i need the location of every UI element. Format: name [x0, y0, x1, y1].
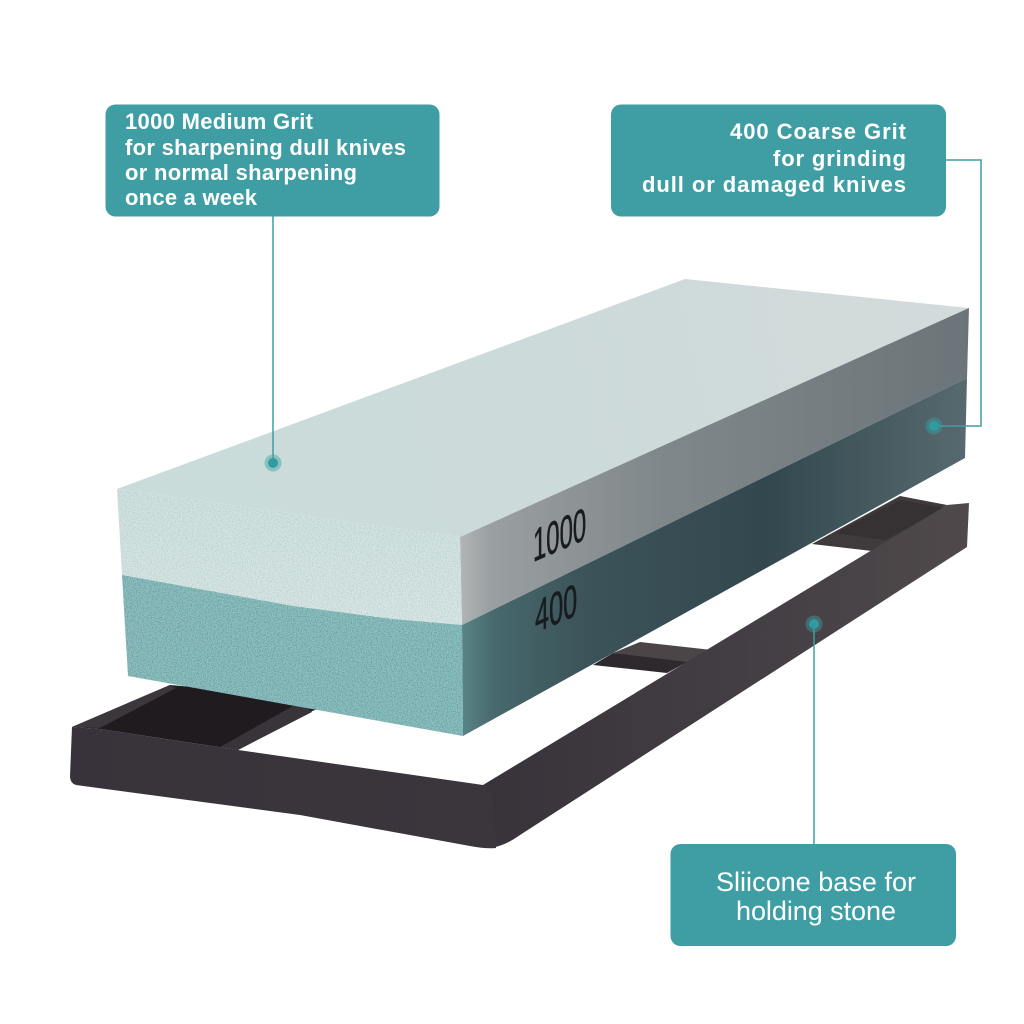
callout text: 400 Coarse Grit: [730, 119, 907, 144]
callout text: for sharpening dull knives: [125, 135, 406, 160]
callout box: [670, 844, 956, 946]
frame: front rail: [70, 727, 496, 848]
stone: right side 1000 grit layer: [460, 308, 969, 625]
frame: middle crossbar: [593, 642, 712, 673]
callout text: once a week: [125, 185, 258, 210]
leader line: 1000 grit: [264, 216, 282, 472]
stone marking: 400: 400: [535, 575, 577, 644]
frame: back rail and crossbar: [812, 496, 947, 551]
stone: top face: [117, 279, 969, 537]
callout text: dull or damaged knives: [642, 172, 906, 197]
stone marking: 1000: 1000: [533, 497, 586, 572]
callout text: [716, 867, 916, 926]
callout text: 1000 Medium Grit: [125, 109, 314, 134]
callout text: holding stone: [736, 896, 896, 926]
whetstone: [117, 279, 969, 736]
frame: right rail: [483, 503, 969, 848]
callout: silicone base: [670, 844, 956, 946]
stone: front 400 grit layer: [122, 575, 463, 736]
callout box: [611, 104, 946, 216]
callout: 1000 medium grit: [106, 104, 440, 216]
stone: right side 400 grit layer: [462, 378, 967, 736]
leader line: silicone base: [806, 616, 822, 844]
callout text: Sliicone base for: [716, 867, 916, 897]
callout: 400 coarse grit: [611, 104, 946, 216]
leader line: 400 grit: [926, 160, 981, 434]
silicone base frame: [70, 496, 969, 848]
frame: left end well: [72, 685, 340, 750]
callout text: [125, 109, 406, 210]
callout text: for grinding: [773, 146, 906, 171]
callout text: [642, 119, 907, 197]
callout box: [106, 104, 440, 216]
callout text: or normal sharpening: [125, 160, 357, 185]
stone: front 1000 grit layer: [117, 489, 462, 625]
